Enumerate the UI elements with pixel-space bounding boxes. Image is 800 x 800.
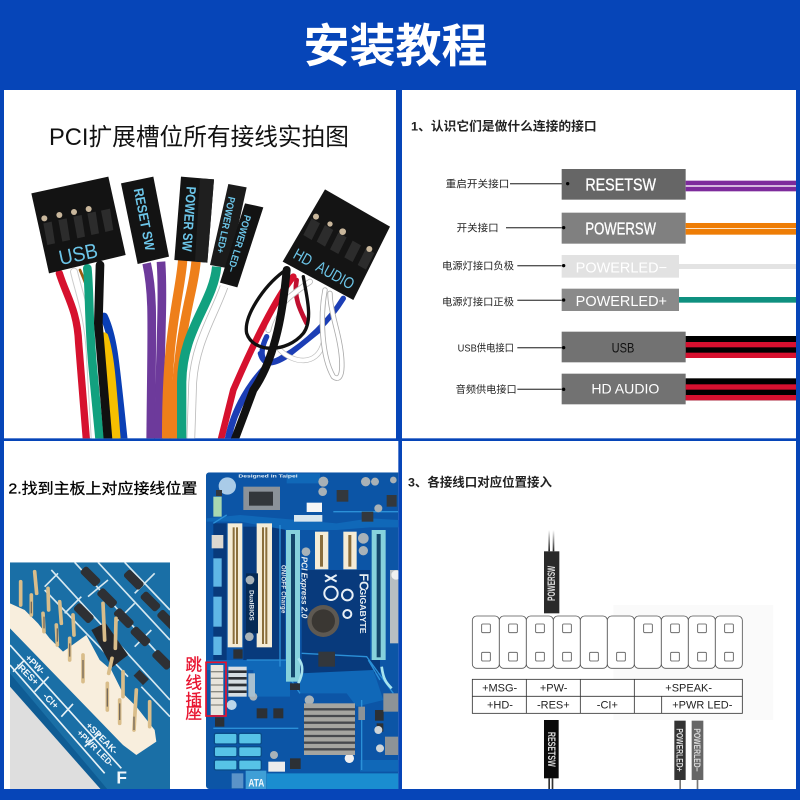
pin label table: -CI+ — [597, 700, 618, 712]
pin label table: -RES+ — [537, 700, 570, 712]
pin label table: +SPEAK- — [665, 683, 712, 695]
row: usb power — [458, 332, 796, 362]
row: reset switch: 重启开关接口 — [446, 177, 509, 190]
photo: motherboard: ON/OFF Charge — [280, 565, 286, 614]
photo: motherboard: GIGABYTE — [358, 588, 368, 634]
ata logo: ATA — [248, 778, 265, 790]
power sw connector: POWER SW — [179, 186, 199, 252]
red label: jumper socket: 跳 — [185, 656, 202, 675]
row: hd audio power: 音频供电接口 — [456, 383, 517, 396]
row: power switch: POWERSW — [585, 219, 656, 239]
panel heading: step 3: 3、各接线口对应位置接入 — [408, 475, 553, 490]
red label: jumper socket: 插 — [185, 691, 202, 710]
photo: header close-up: +PW- — [23, 653, 47, 676]
panel: connector photo — [4, 90, 396, 443]
photo: motherboard — [206, 472, 406, 790]
pin label table: +PWR LED- — [672, 700, 733, 712]
sata ports — [214, 733, 261, 770]
photo: header close-up: -RES+ — [14, 660, 41, 687]
pin label table: +PW- — [540, 683, 568, 695]
row: usb power: USB供电接口 — [458, 341, 514, 354]
power led plus connector — [210, 184, 247, 268]
panel: motherboard location — [4, 441, 406, 790]
row: power led negative: POWERLED− — [576, 260, 667, 276]
photo: header close-up — [10, 562, 178, 790]
close-up: black jumper — [91, 623, 128, 667]
connector: power led plus: POWERLED+ — [675, 728, 685, 772]
highlight box — [206, 662, 226, 716]
row: power led negative: 电源灯接口负极 — [442, 259, 514, 272]
board: bright copper zones — [207, 473, 398, 789]
row: reset switch — [446, 169, 796, 200]
red label: jumper socket: 线 — [185, 673, 202, 692]
power led minus connector: POWER LED− — [224, 213, 252, 274]
usb wires — [59, 265, 124, 443]
heatsink — [304, 703, 355, 755]
row: power switch — [457, 213, 796, 244]
pci slots — [228, 523, 357, 647]
panel heading: step 2: 2.找到主板上对应接线位置 — [8, 479, 197, 497]
board: logos — [324, 575, 353, 618]
connector: power sw — [544, 530, 559, 613]
panel heading: step 1: 1、认识它们是做什么连接的接口 — [411, 119, 597, 134]
row: power led positive: POWERLED+ — [576, 294, 667, 310]
panel heading: photo: PCI扩展槽位所有接线实拍图 — [49, 124, 349, 151]
row: hd audio power — [456, 374, 796, 404]
close-up: header pins — [21, 572, 150, 730]
power sw wires — [167, 260, 196, 443]
power led minus connector — [220, 203, 263, 287]
red label: jumper socket — [185, 656, 202, 722]
photo: header close-up: +PWR LED- — [75, 728, 116, 769]
hd audio connector: HD AUDIO — [290, 246, 357, 293]
title: 安装教程 — [304, 20, 488, 72]
pin label table: +MSG- — [482, 683, 518, 695]
photo: motherboard: FC — [356, 573, 370, 590]
row: usb power: USB — [612, 340, 634, 356]
board: dark zones — [213, 523, 380, 673]
usb connector — [31, 177, 126, 273]
hd audio connector — [283, 189, 390, 300]
connector: power led minus: POWERLED− — [692, 728, 702, 772]
row: power led positive — [442, 289, 796, 311]
panel: wiring diagram — [402, 441, 796, 789]
row: power led negative — [442, 255, 796, 278]
power led plus connector: POWER LED+ — [214, 196, 236, 254]
usb connector: USB — [57, 239, 100, 270]
reset sw connector: RESET SW — [131, 187, 158, 252]
jumper header area — [211, 665, 255, 715]
hd audio wires — [220, 270, 343, 443]
connector: reset sw — [544, 720, 559, 789]
photo: header close-up: -CI+ — [41, 691, 61, 711]
pin header — [472, 616, 742, 668]
power led wires — [182, 267, 224, 443]
photo: motherboard: DualBIOS — [247, 590, 254, 621]
row: hd audio power: HD AUDIO — [591, 380, 659, 396]
photo: motherboard: PCI Express 2.0 — [300, 557, 310, 618]
power sw connector — [174, 177, 214, 263]
reset sw connector — [121, 177, 169, 264]
row: power led positive: 电源灯接口正极 — [442, 296, 514, 309]
pin label table: +HD- — [487, 700, 513, 712]
photo: header close-up: F — [116, 767, 127, 787]
connector: reset sw: RESETSW — [545, 732, 557, 767]
red label: jumper socket: 座 — [185, 703, 202, 722]
reset sw wires — [147, 262, 162, 443]
row: reset switch: RESETSW — [585, 175, 657, 195]
board text: designed in taipei: Designed in Taipei — [238, 473, 298, 478]
pcie slots — [286, 530, 392, 688]
panel: connector legend — [402, 90, 796, 438]
pin label table — [472, 679, 742, 713]
connector: power sw: POWERSW — [546, 565, 558, 601]
close-up: white header row — [10, 603, 156, 755]
row: power switch: 开关接口 — [457, 221, 499, 234]
photo: header close-up: +SPEAK- — [84, 720, 120, 756]
